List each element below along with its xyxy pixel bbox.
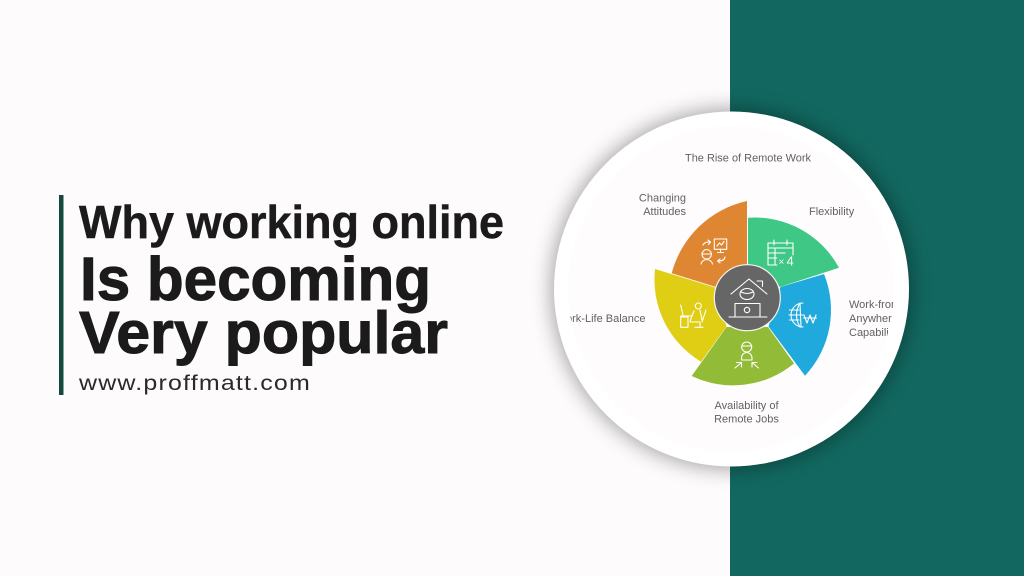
label: work-from-anywhere: Capability — [849, 327, 898, 339]
label: work-from-anywhere: Work-from — [849, 299, 900, 311]
label: changing attitudes: Attitudes — [643, 206, 686, 218]
label: flexibility: Flexibility — [809, 206, 855, 218]
diagram heading: The Rise of Remote Work — [685, 152, 811, 164]
segment: work from anywhere — [768, 274, 831, 376]
icon: calendar times four: 4 — [786, 254, 794, 268]
label: work-from-anywhere: Anywhere — [849, 313, 898, 325]
icon: person, chart and arrows — [701, 239, 727, 264]
segment: flexibility — [748, 217, 839, 287]
icon: remote worker at home — [729, 279, 767, 317]
title line 1: Why working online — [79, 196, 504, 248]
accent bar — [59, 195, 64, 395]
label: availability of remote jobs: Remote Jobs — [714, 414, 779, 426]
circle shadow — [552, 110, 910, 468]
teal side panel — [730, 0, 1024, 576]
icon: globe and currency — [789, 303, 816, 327]
icon: calendar times four: × — [778, 257, 784, 268]
title line 2: Is becoming — [80, 245, 431, 313]
label: changing attitudes — [639, 194, 686, 215]
segment: work-life balance — [654, 269, 726, 362]
icon: calendar times four — [768, 240, 794, 268]
segment: changing attitudes — [672, 201, 747, 287]
website url: www.proffmatt.com — [78, 372, 311, 395]
diagram panel — [570, 154, 894, 422]
segment: availability of remote jobs — [692, 327, 794, 385]
label: availability of remote jobs: Availability of — [714, 400, 779, 412]
hub — [714, 265, 780, 331]
title — [79, 196, 504, 366]
label: work-life balance: Work-Life Balance — [556, 313, 646, 325]
white circle — [554, 112, 909, 466]
label: availability of remote jobs — [714, 401, 779, 422]
label: work-from-anywhere — [849, 300, 894, 338]
label: changing attitudes: Changing — [639, 192, 686, 204]
icon: person at desk — [681, 303, 706, 327]
icon: person with arrows — [735, 342, 758, 368]
title line 3: Very popular — [79, 300, 448, 366]
